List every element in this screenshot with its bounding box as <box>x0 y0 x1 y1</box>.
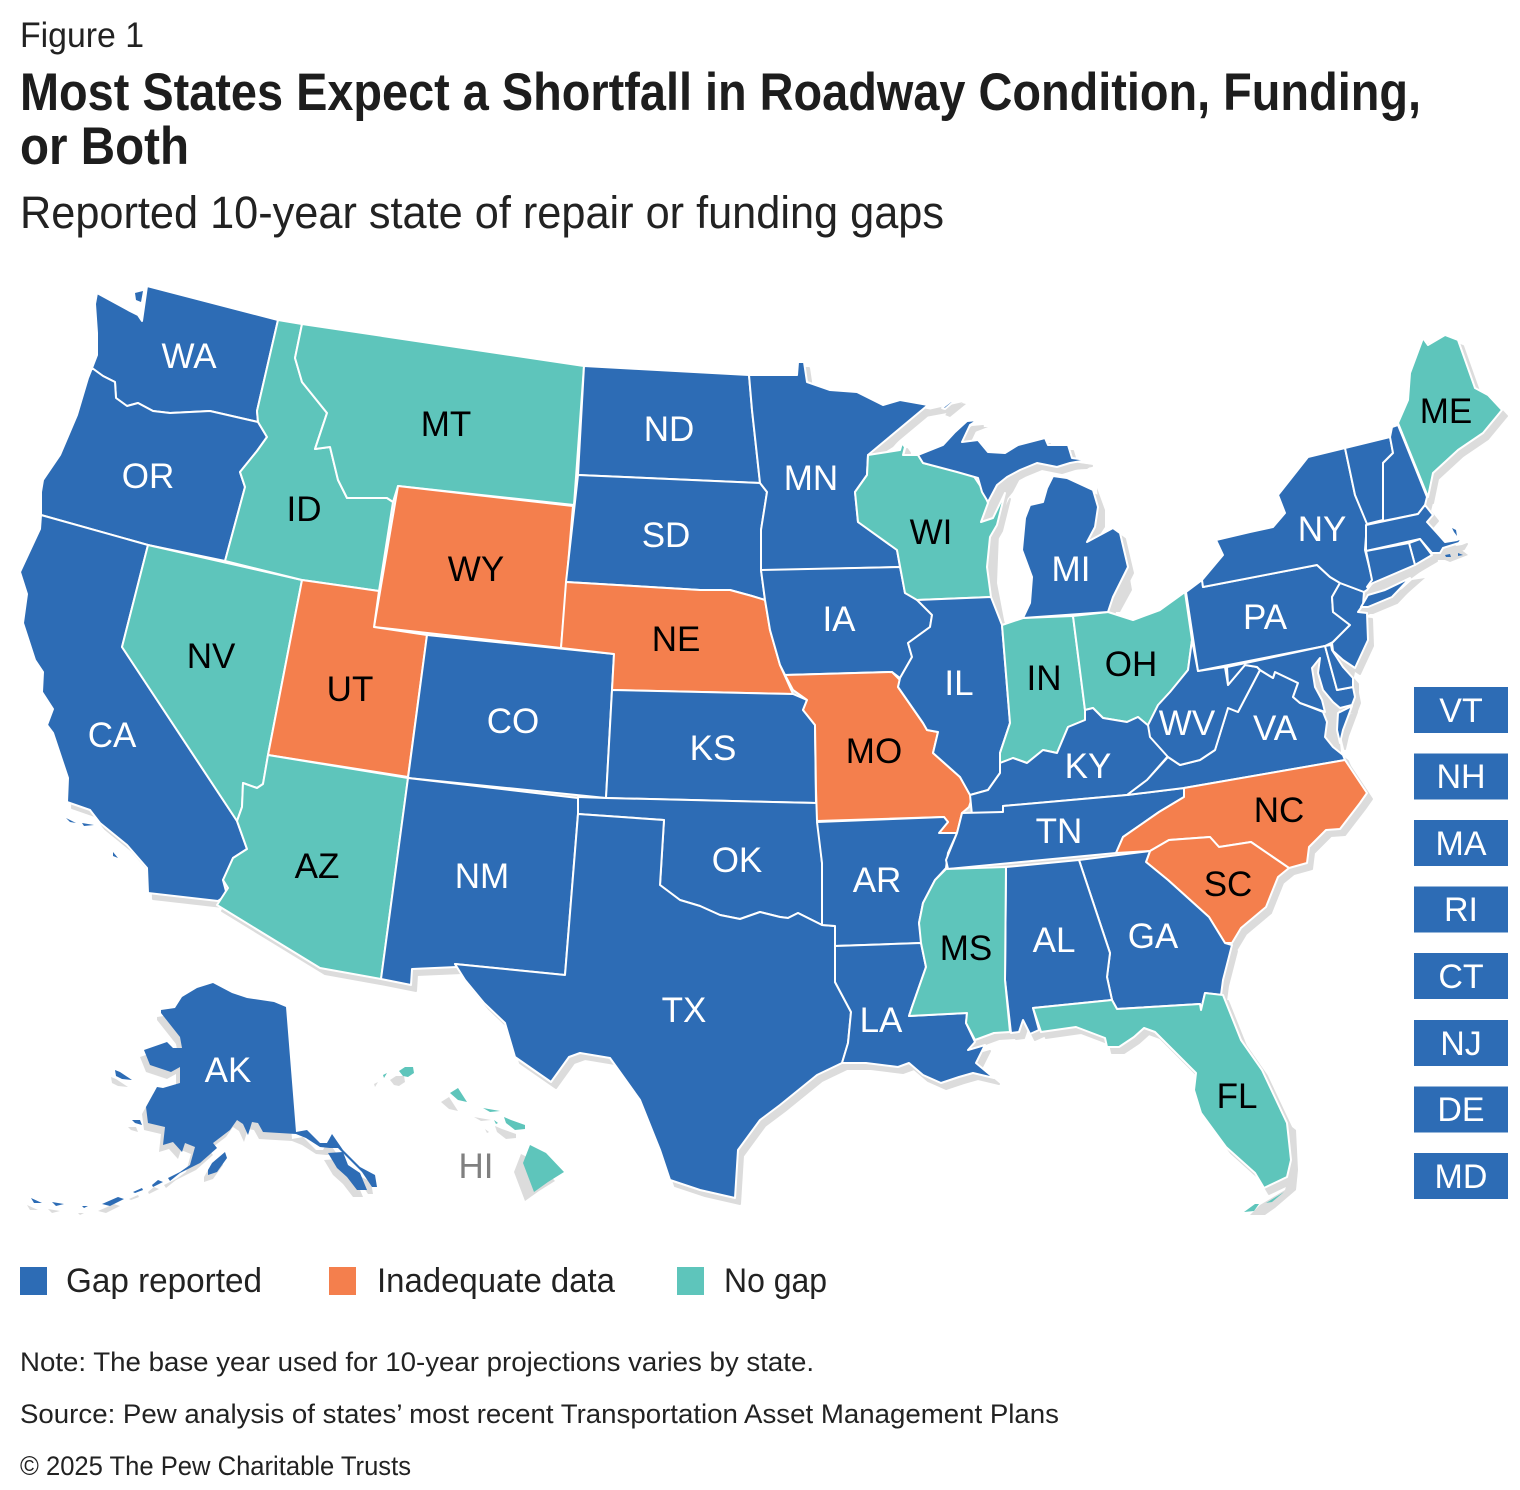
state: CT <box>1366 543 1415 587</box>
state labels on light fills: MT <box>421 405 471 444</box>
state: MS <box>909 867 1010 1040</box>
state: MA <box>1366 505 1462 553</box>
state labels on dark fills: AR <box>853 861 901 900</box>
state labels on light fills: NV <box>187 637 236 676</box>
map: Hawaii <box>383 1067 564 1192</box>
map: contiguous United States <box>20 286 1502 1198</box>
state labels on light fills: OH <box>1105 645 1157 684</box>
state labels on light fills: MS <box>940 929 992 968</box>
box: VT: VT <box>1439 692 1483 730</box>
legend: gap reported: Gap reported <box>66 1262 262 1300</box>
state labels on dark fills: NY <box>1298 510 1346 549</box>
title <box>20 63 1421 176</box>
legend <box>20 1262 827 1300</box>
Alaska islands <box>115 1070 132 1080</box>
box: MD <box>1414 1153 1508 1199</box>
state: AR <box>817 817 957 946</box>
state: KS <box>606 690 816 803</box>
map: Alaska <box>31 983 377 1208</box>
state: NJ <box>1332 583 1368 668</box>
state labels on dark fills: AK <box>205 1051 251 1090</box>
state labels on light fills: SC <box>1204 865 1252 904</box>
box: DE <box>1414 1086 1508 1132</box>
state: OK <box>578 797 822 925</box>
state: NV <box>122 545 302 821</box>
state labels on dark fills: NM <box>455 857 509 896</box>
legend: no gap: No gap <box>724 1262 827 1300</box>
state labels on dark fills: AL <box>1033 921 1075 960</box>
state: ND <box>578 366 760 483</box>
state labels on dark fills: GA <box>1128 917 1179 956</box>
box: NJ: NJ <box>1440 1025 1482 1063</box>
state labels on dark fills: MN <box>784 459 838 498</box>
state labels on light fills: WI <box>910 513 952 552</box>
box: MA <box>1414 820 1508 866</box>
state: IL <box>898 597 1010 795</box>
state labels on dark fills: IA <box>822 600 856 639</box>
state labels on dark fills: PA <box>1243 598 1288 637</box>
state: TX <box>455 814 851 1198</box>
state labels on light fills: FL <box>1217 1077 1257 1116</box>
state: MD <box>1227 646 1355 712</box>
state labels on dark fills: WA <box>161 337 217 376</box>
state: SD <box>566 475 767 600</box>
state: WY <box>374 486 573 648</box>
state labels on dark fills: IL <box>944 664 974 703</box>
box: NJ <box>1414 1020 1508 1066</box>
box: NH <box>1414 754 1508 800</box>
legend: inadequate data: Inadequate data <box>377 1262 615 1300</box>
state: NC <box>1116 760 1367 868</box>
state labels on light fills: WY <box>448 550 504 589</box>
box: RI: RI <box>1444 891 1478 929</box>
source: Source: Pew analysis of states’ most recent Transportation Asset Management Plans <box>20 1399 1059 1429</box>
state labels on dark fills: VA <box>1253 709 1298 748</box>
state: NM <box>381 778 578 985</box>
figure label: Figure 1 <box>20 16 144 55</box>
state: CA <box>20 515 247 901</box>
coastal and great lakes shadows <box>873 402 1468 1215</box>
box: CT <box>1414 953 1508 999</box>
state: DE <box>1325 645 1353 690</box>
map: Florida keys <box>1244 1192 1284 1212</box>
state: VT <box>1345 437 1393 524</box>
state labels on dark fills: CO <box>487 702 539 741</box>
state labels on dark fills: ND <box>644 410 694 449</box>
state labels on light fills: ME <box>1420 392 1472 431</box>
state: VA <box>1127 670 1345 795</box>
state: AZ <box>217 755 408 979</box>
state: CO <box>408 635 614 798</box>
state: VA eastern shore <box>1337 706 1352 743</box>
state labels on dark fills: TX <box>662 991 706 1030</box>
label: HI: HI <box>458 1147 494 1186</box>
copyright: © 2025 The Pew Charitable Trusts <box>20 1451 411 1481</box>
box: CT: CT <box>1438 958 1484 996</box>
legend: no gap <box>677 1262 827 1300</box>
state: WI <box>855 443 1005 600</box>
state: IN <box>1000 616 1085 763</box>
state labels on dark fills <box>88 337 1346 1090</box>
state: RI <box>1409 539 1432 565</box>
state labels on dark fills: OK <box>712 841 762 880</box>
state: MO <box>785 672 972 833</box>
state labels on light fills: UT <box>327 670 373 709</box>
state: IA <box>761 567 932 678</box>
state labels on dark fills: KY <box>1065 747 1111 786</box>
state: MT <box>295 324 584 505</box>
state labels on light fills: NC <box>1254 791 1304 830</box>
state: NY <box>1202 448 1373 592</box>
state: KY <box>970 708 1168 815</box>
small state boxes <box>1414 687 1508 1199</box>
box: MD: MD <box>1435 1158 1487 1196</box>
state: UT <box>268 580 427 777</box>
state: MI upper peninsula <box>918 420 1087 502</box>
title: or Both <box>20 117 189 176</box>
state: TN <box>946 788 1184 869</box>
state labels on light fills: AZ <box>295 847 339 886</box>
state: NE <box>561 582 793 694</box>
state labels on light fills: MO <box>846 732 902 771</box>
state labels on dark fills: WV <box>1159 704 1216 743</box>
state labels on light fills: IN <box>1026 659 1062 698</box>
state labels on light fills: NE <box>652 620 700 659</box>
subtitle: Reported 10-year state of repair or funding gaps <box>20 187 944 238</box>
state: PA <box>1186 565 1350 671</box>
state labels on dark fills: MI <box>1052 550 1090 589</box>
box: RI <box>1414 886 1508 932</box>
state: NH <box>1383 425 1427 521</box>
state labels on dark fills: CA <box>88 716 137 755</box>
state: GA <box>1079 851 1232 1010</box>
state: FL <box>1033 993 1291 1188</box>
state: WV <box>1148 640 1260 765</box>
state: SC <box>1146 837 1289 943</box>
state: ME <box>1398 335 1502 497</box>
state labels on dark fills: TN <box>1036 812 1082 851</box>
state: OH <box>1073 592 1192 727</box>
state labels on dark fills: LA <box>860 1001 903 1040</box>
box: NH: NH <box>1436 758 1486 796</box>
state: NY Long Island <box>1361 578 1410 607</box>
state: ID <box>225 320 393 591</box>
state labels on dark fills: KS <box>690 729 736 768</box>
note: Note: The base year used for 10-year projections varies by state. <box>20 1347 814 1377</box>
state labels on light fills <box>187 392 1472 1116</box>
state: LA <box>835 943 994 1083</box>
state: MN <box>749 362 928 570</box>
box: VT <box>1414 687 1508 733</box>
map: coastal islands <box>66 291 1463 858</box>
state labels on light fills: ID <box>286 490 322 529</box>
state: MI Isle Royale <box>942 398 955 409</box>
state: AL <box>1005 860 1112 1034</box>
state: OR <box>41 368 267 561</box>
state: MI lower peninsula <box>1022 476 1128 618</box>
state labels on dark fills: OR <box>122 457 174 496</box>
state labels on dark fills: SD <box>642 516 690 555</box>
box: DE: DE <box>1437 1091 1485 1129</box>
state: WA <box>92 286 278 422</box>
box: MA: MA <box>1436 825 1487 863</box>
